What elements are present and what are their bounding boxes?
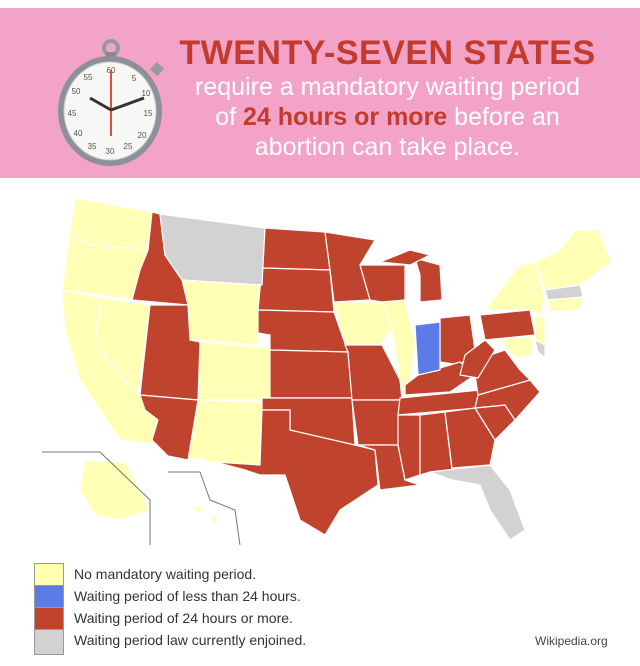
icon: stopwatch: 10 (142, 89, 151, 98)
source credit: Wikipedia.org (535, 634, 608, 648)
icon: stopwatch: 60 (107, 66, 116, 75)
icon: stopwatch (58, 39, 164, 166)
legend: Waiting period of 24 hours or more. (74, 610, 293, 626)
icon: stopwatch: 35 (88, 142, 97, 151)
legend: Waiting period law currently enjoined. (74, 632, 306, 648)
icon: stopwatch: 40 (74, 129, 83, 138)
title text: TWENTY-SEVEN STATES (179, 34, 596, 72)
icon: stopwatch: 30 (106, 147, 115, 156)
subtitle text (195, 73, 580, 161)
map: US states (42, 198, 612, 546)
icon: stopwatch: 45 (68, 109, 77, 118)
subtitle text: abortion can take place. (255, 133, 520, 161)
subtitle text: of 24 hours or more before an (215, 103, 560, 131)
legend (34, 563, 306, 655)
icon: stopwatch: 5 (132, 74, 137, 83)
icon: stopwatch: 15 (144, 109, 153, 118)
icon: stopwatch: 55 (84, 73, 93, 82)
icon: stopwatch: 25 (124, 142, 133, 151)
icon: stopwatch: 50 (72, 87, 81, 96)
legend: Waiting period of less than 24 hours. (74, 588, 301, 604)
icon: stopwatch: 20 (138, 131, 147, 140)
legend: No mandatory waiting period. (74, 566, 256, 582)
header banner (0, 8, 640, 178)
subtitle text: require a mandatory waiting period (195, 73, 580, 101)
